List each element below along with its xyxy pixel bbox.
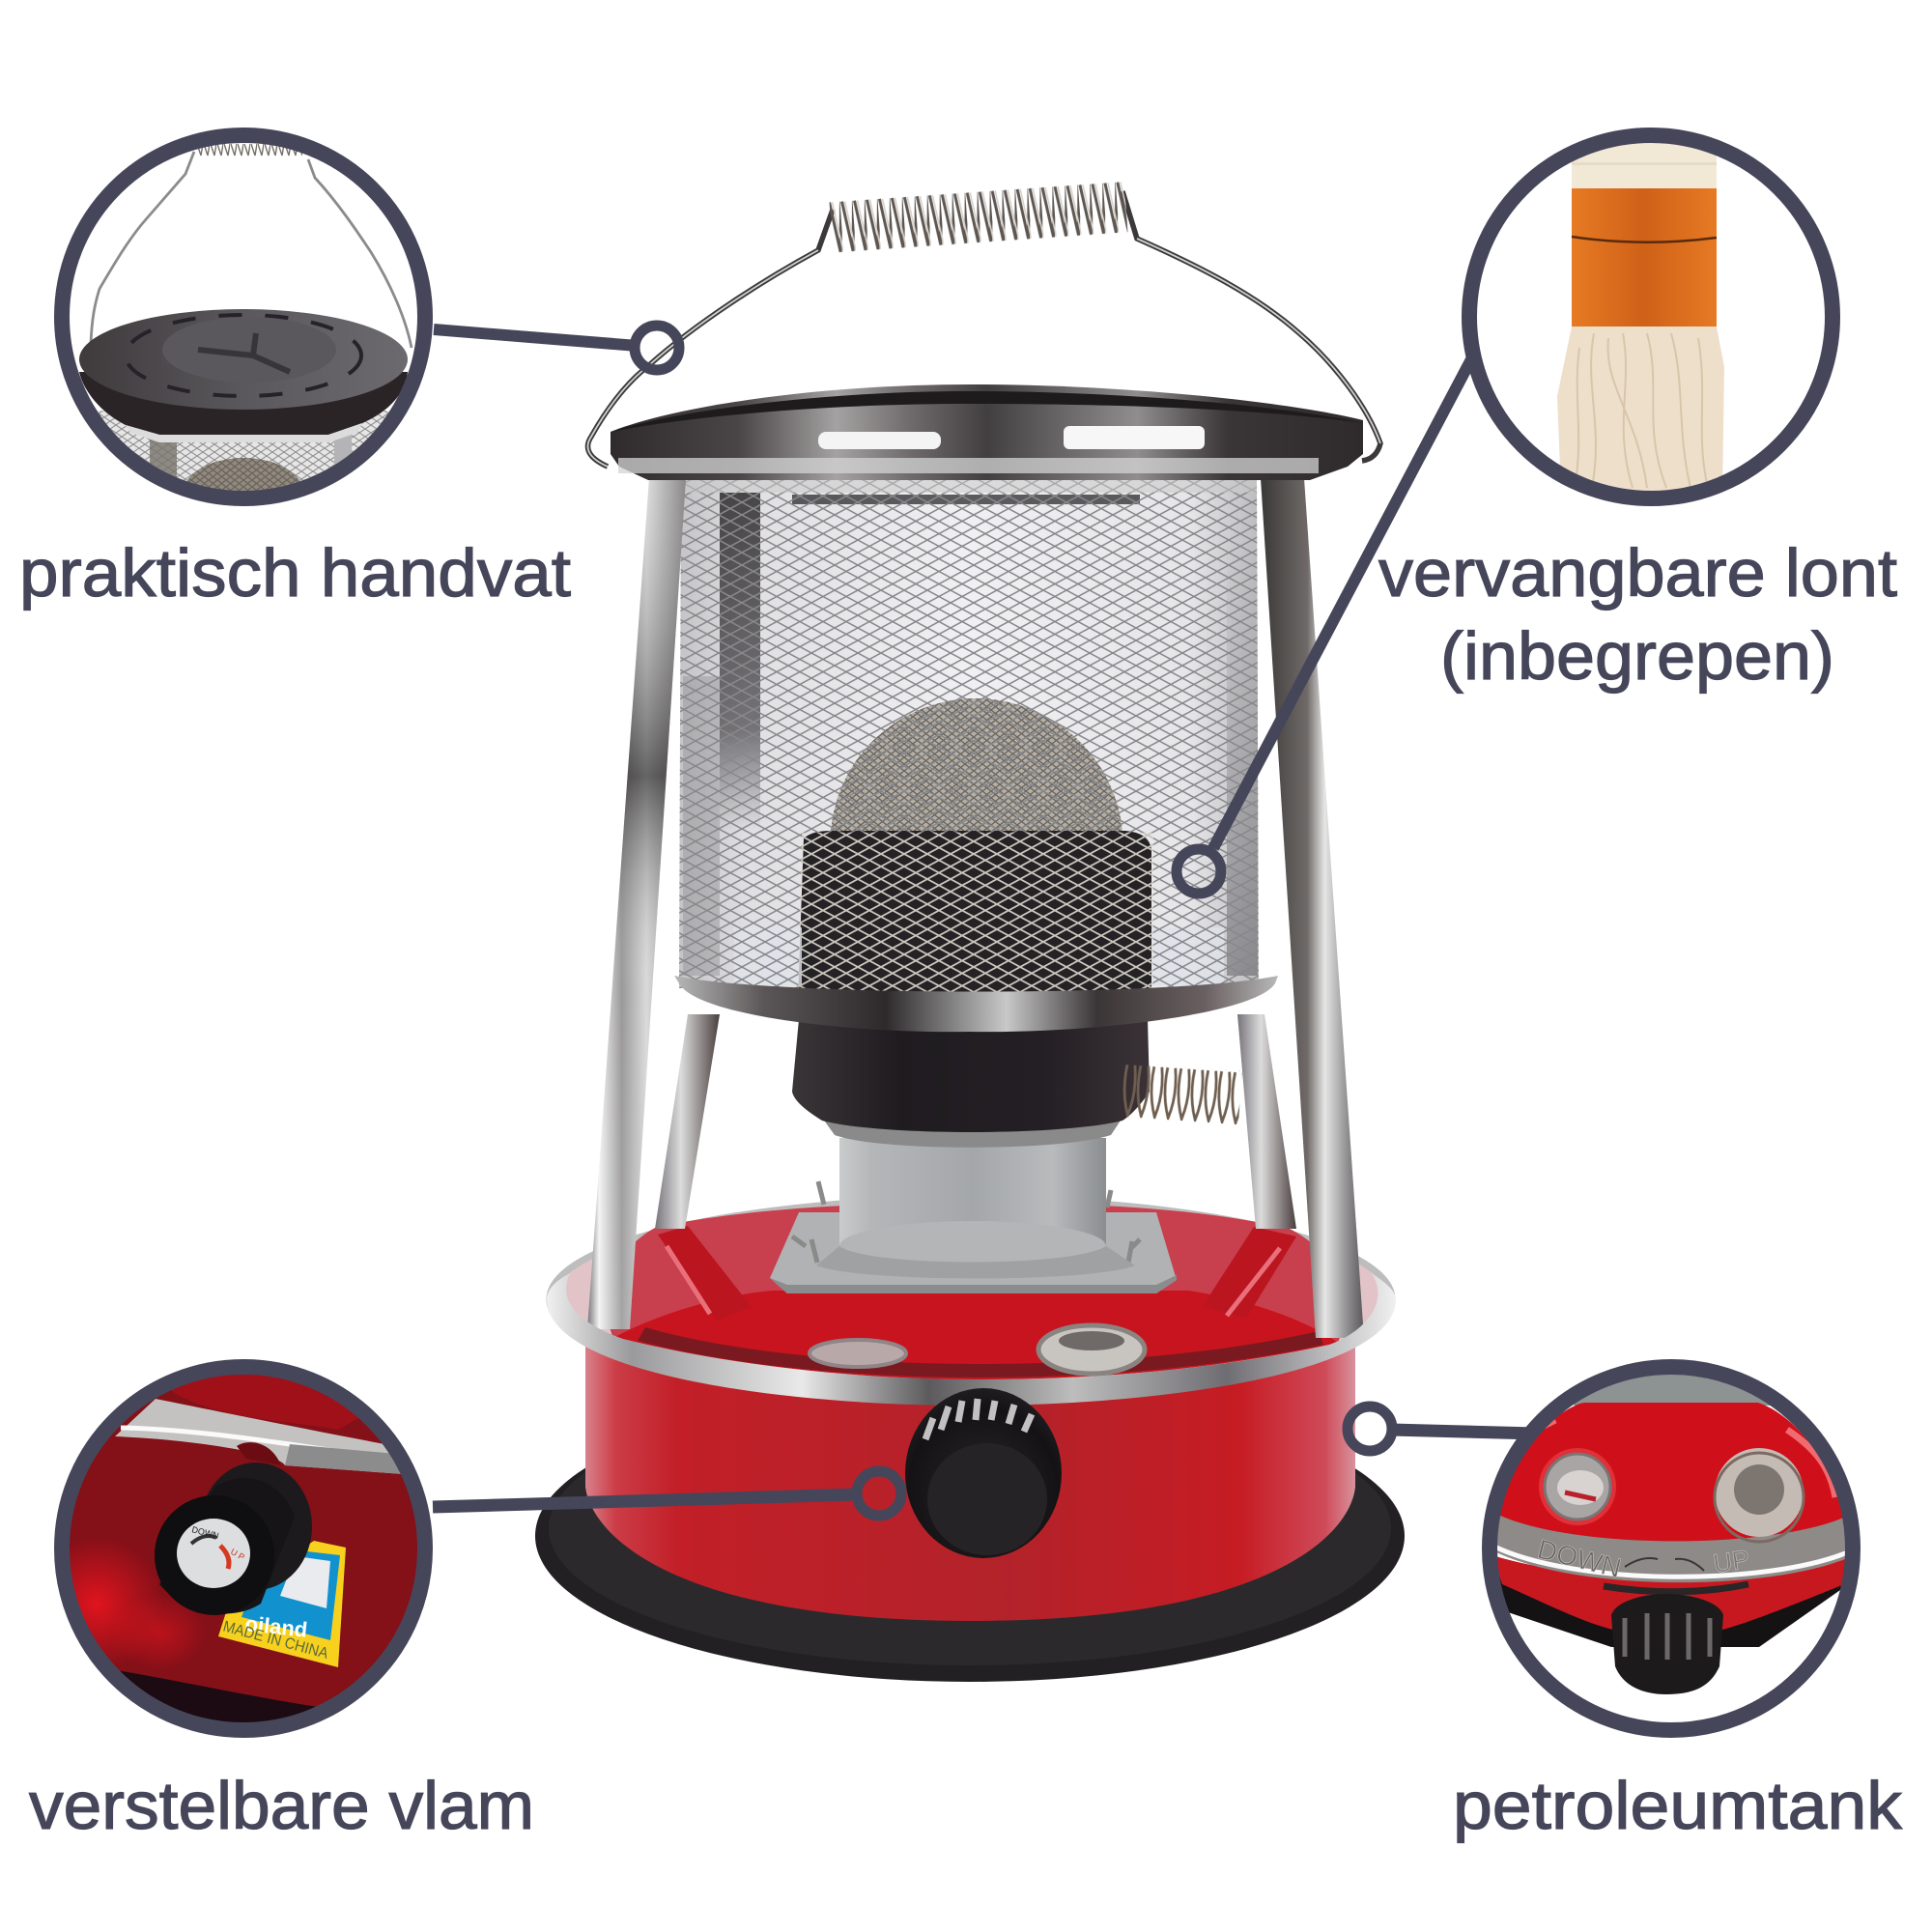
cream top band: [1572, 143, 1717, 189]
lid rim: [79, 372, 408, 435]
cotton tassel: [1557, 327, 1724, 493]
galvanised burner column: [816, 1138, 1135, 1279]
black burner drum: [792, 1019, 1150, 1132]
detail circle: flame knob: [29, 1359, 433, 1748]
filler cap: [1715, 1448, 1804, 1542]
product sticker: [218, 1541, 346, 1667]
lid top: [79, 309, 408, 410]
detail circle: flame knob: U P: [229, 1547, 246, 1562]
knob: [200, 1463, 312, 1590]
ring: [62, 135, 425, 498]
detail circle: wick: [1469, 135, 1833, 498]
chrome strip: [115, 1399, 403, 1474]
label: flame: verstelbare vlam: [29, 1768, 534, 1843]
dark inner cylinder: [798, 831, 1151, 1000]
carry handle wire: [587, 191, 1380, 467]
detail circle: flame knob: DOWN: [191, 1524, 220, 1541]
collar: [822, 1118, 1122, 1148]
level gauge: [1539, 1448, 1616, 1525]
knob: [1611, 1594, 1723, 1694]
detail circle: fuel tank: [1481, 1359, 1863, 1742]
ring: [1490, 1367, 1853, 1730]
black tray edge: [1499, 1576, 1841, 1647]
label: handle: praktisch handvat: [19, 535, 571, 611]
lid: [611, 384, 1363, 480]
label: wick: [1378, 535, 1897, 694]
lower cage ring: [674, 976, 1278, 1032]
kerosene heater illustration: [535, 180, 1405, 1682]
basket mesh: [97, 411, 390, 481]
red lower band: [1492, 1555, 1850, 1630]
inner dome: [831, 698, 1122, 833]
wire mesh cage: [679, 472, 1259, 1000]
burner mounting plate with wing nuts: [770, 1181, 1177, 1293]
inner support legs: [655, 1014, 1296, 1229]
detail circle: fuel tank: DOWN: [1535, 1534, 1624, 1583]
adjustment knob: [905, 1388, 1062, 1558]
label: wick: vervangbare lont: [1378, 535, 1897, 611]
side spring: [1121, 1063, 1242, 1124]
ring: [62, 1367, 425, 1730]
detail circle: handle and lid: [62, 135, 425, 527]
detail circle: flame knob: oiland: [243, 1611, 309, 1642]
outer legs: [587, 478, 1364, 1338]
red fuel tank: [585, 1323, 1355, 1621]
chrome rim front: [547, 1273, 1396, 1406]
red top: [1500, 1403, 1843, 1542]
chrome band: [1492, 1512, 1850, 1582]
detail circle: fuel tank: UP: [1712, 1545, 1751, 1578]
connector: tank: [1348, 1406, 1536, 1451]
grey plate: [1574, 1375, 1770, 1406]
label: tank: petroleumtank: [1453, 1768, 1903, 1843]
level gauge and filler cap: [810, 1325, 1145, 1374]
detail circle: flame knob: MADE IN CHINA: [221, 1618, 330, 1662]
label: wick: (inbegrepen): [1440, 618, 1834, 694]
connector: wick: [1177, 359, 1471, 894]
red body: [70, 1391, 417, 1707]
wire handle: [91, 152, 412, 348]
red tank top: [607, 1203, 1345, 1379]
ring: [1469, 135, 1833, 498]
chrome rim back: [550, 1199, 1392, 1400]
connector: flame control: [433, 1471, 901, 1516]
orange band: [1572, 188, 1717, 327]
handle spring: [829, 180, 1128, 254]
connector: handle: [434, 326, 679, 370]
black drip tray: [535, 1390, 1405, 1682]
